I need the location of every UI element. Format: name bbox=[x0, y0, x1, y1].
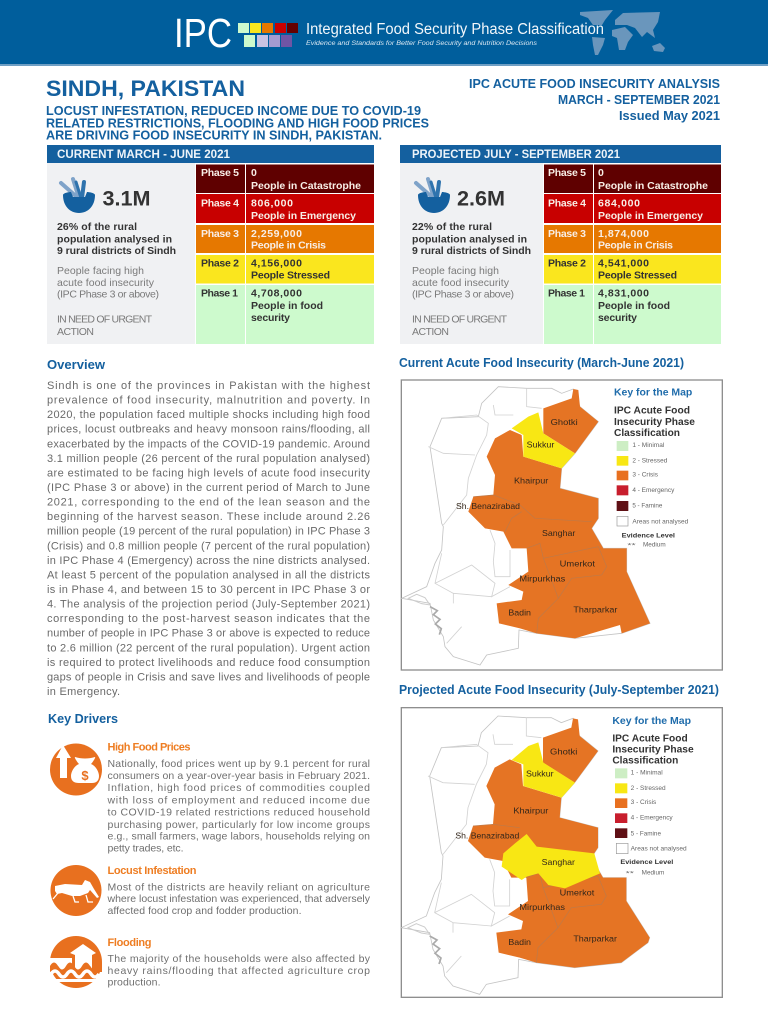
projected phase 2 row bbox=[544, 255, 721, 284]
map key: Medium bbox=[643, 542, 666, 549]
map key: 2 - Stressed bbox=[632, 457, 668, 464]
overview text: exacerbated by the impacts of the COVID-19 pandemic. Around bbox=[47, 438, 370, 450]
current population share: 9 rural districts of Sindh bbox=[57, 245, 176, 257]
panel: current map bbox=[401, 380, 722, 670]
overview text: 2020, the population faced multiple shocks including high food bbox=[47, 409, 370, 421]
projected phase 2 row: Phase 2 bbox=[548, 258, 586, 270]
driver: locust infestation bbox=[50, 865, 371, 917]
subtitle bbox=[46, 103, 429, 142]
map: phase 2 districts Sukkur and Sanghar bbox=[502, 742, 600, 888]
current phase 1 row bbox=[196, 285, 374, 344]
driver: high food prices bbox=[50, 742, 370, 854]
projected phase 1 row: security bbox=[598, 312, 637, 324]
map: district labels: Ghotki bbox=[550, 747, 577, 757]
projected population share: population analysed in bbox=[412, 234, 527, 246]
current population share bbox=[57, 221, 176, 257]
projected phase 1 row: 4,831,000 bbox=[598, 288, 649, 300]
projected phase 4 row: 684,000 bbox=[598, 198, 640, 210]
projected phase 5 row bbox=[544, 164, 721, 193]
overview text bbox=[47, 380, 370, 698]
map key: Insecurity Phase bbox=[614, 417, 696, 428]
overview text: is in Phase 4, and between 15 to 30 percent in IPC Phase 3 or bbox=[47, 584, 370, 596]
map: district labels: Tharparkar bbox=[573, 934, 617, 944]
overview text: number of people in IPC Phase 3 or above is expected to reduce bbox=[47, 628, 370, 640]
high food prices text: Nationally, food prices went up by 9.1 percent for rural bbox=[108, 758, 370, 770]
map: district labels: Mirpurkhas bbox=[519, 574, 565, 584]
current phase 5 row bbox=[196, 164, 374, 193]
current population share: population analysed in bbox=[57, 234, 172, 246]
high food prices text bbox=[106, 758, 370, 854]
map key: IPC Acute Food bbox=[614, 406, 690, 417]
projected need description: IN NEED OF URGENT bbox=[412, 314, 508, 326]
map key: Key for the Map bbox=[612, 716, 691, 727]
map: district labels: Sanghar bbox=[542, 528, 576, 538]
map: district labels: Khairpur bbox=[513, 805, 549, 815]
high food prices text: purchasing power, particularly for low income groups bbox=[108, 819, 370, 831]
panel: projected map bbox=[401, 708, 722, 997]
high food prices text: Inflation, high food prices of commodities coupled bbox=[108, 782, 370, 794]
locust infestation heading: Locust Infestation bbox=[108, 865, 197, 877]
icon: bowl with wheat bbox=[416, 179, 450, 213]
icon: food prices bbox=[50, 744, 102, 796]
overview text: (Crisis) and 0.8 million people (7 percent of the rural population) bbox=[47, 540, 370, 552]
current phase 3 row: Phase 3 bbox=[201, 228, 239, 240]
map key: Medium bbox=[642, 870, 664, 877]
high food prices text: consumers on a year-over-year basis in February 2021. bbox=[108, 770, 370, 782]
overview text: 4. The analysis of the projection period (July-September 2021) bbox=[47, 599, 370, 611]
map: district labels: Khairpur bbox=[514, 475, 549, 485]
projected population share: 9 rural districts of Sindh bbox=[412, 245, 531, 257]
current phase 2 row bbox=[196, 255, 374, 284]
map key: Key for the Map bbox=[614, 388, 692, 399]
high food prices text: e.g., small farmers, wage labors, households relying on bbox=[108, 830, 370, 842]
map key: ** bbox=[626, 870, 635, 877]
locust infestation text: where locust infestation was experienced, that adversely bbox=[106, 893, 371, 905]
map key: 4 - Emergency bbox=[632, 487, 675, 494]
current need description: (IPC Phase 3 or above) bbox=[57, 288, 159, 300]
current phase 1 row: security bbox=[251, 312, 290, 324]
projected phase 5 row: 0 bbox=[598, 167, 604, 179]
overview text: (IPC Phase 3 or above) in the current period of March to June bbox=[47, 482, 370, 494]
current phase 2 row: 4,156,000 bbox=[251, 258, 302, 270]
map: district labels bbox=[455, 747, 617, 947]
current phase 3 row: People in Crisis bbox=[251, 240, 326, 252]
subtitle: LOCUST INFESTATION, REDUCED INCOME DUE TO COVID-19 bbox=[46, 103, 421, 118]
current phase 4 row: 806,000 bbox=[251, 198, 293, 210]
flooding text: The majority of the households were also affected by bbox=[108, 953, 371, 965]
driver: flooding bbox=[50, 936, 371, 988]
current phase 4 row: Phase 4 bbox=[201, 198, 239, 210]
projected need description: ACTION bbox=[412, 326, 449, 338]
projected phase 4 row bbox=[544, 194, 721, 223]
header tagline: Evidence and Standards for Better Food Security and Nutrition Decisions bbox=[306, 40, 538, 47]
icon: food prices: $ bbox=[81, 768, 89, 783]
overview text: At least 5 percent of the population analysed in all the districts bbox=[47, 569, 370, 581]
map: district labels: Sh. Benazirabad bbox=[456, 501, 520, 511]
icon: locust bbox=[50, 865, 102, 916]
map: district labels: Sh. Benazirabad bbox=[455, 830, 520, 840]
overview text: million people (19 percent of the rural population) in IPC Phase 3 bbox=[47, 526, 370, 538]
projected phase 4 row: People in Emergency bbox=[598, 210, 703, 222]
projected need description: (IPC Phase 3 or above) bbox=[412, 288, 514, 300]
high food prices heading: High Food Prices bbox=[108, 742, 190, 754]
map key: 5 - Famine bbox=[632, 503, 663, 510]
overview text: in Emergency. bbox=[47, 686, 120, 698]
key drivers heading: Key Drivers bbox=[48, 711, 118, 726]
projected phase 1 row: People in food bbox=[598, 300, 670, 312]
map: district labels: Sukkur bbox=[526, 769, 554, 779]
panel: current period bbox=[47, 145, 374, 344]
overview text: is required to protect livelihoods and reduce food consumption bbox=[47, 657, 370, 669]
overview heading: Overview bbox=[47, 357, 106, 372]
current map heading: Current Acute Food Insecurity (March-June 2021) bbox=[399, 356, 684, 370]
icon: bowl with wheat bbox=[61, 179, 95, 213]
analysis details: IPC ACUTE FOOD INSECURITY ANALYSIS bbox=[469, 76, 720, 91]
overview text: to 2.6 million (22 percent of the rural population). Urgent action bbox=[47, 642, 370, 654]
panel: projected period bbox=[400, 145, 721, 344]
map: district labels: Sukkur bbox=[527, 439, 555, 449]
high food prices text: with loss of employment and reduced income due bbox=[106, 794, 370, 806]
current phase 1 row: Phase 1 bbox=[201, 288, 238, 300]
projected phase 4 row: Phase 4 bbox=[548, 198, 586, 210]
projected population share bbox=[412, 221, 531, 257]
map key: Insecurity Phase bbox=[612, 745, 694, 756]
analysis details: MARCH - SEPTEMBER 2021 bbox=[558, 92, 720, 107]
current phase 5 row: 0 bbox=[251, 167, 257, 179]
map key: 3 - Crisis bbox=[631, 799, 656, 806]
flooding text: heavy rains/flooding that affected agriculture crop bbox=[108, 965, 370, 977]
current need description: IN NEED OF URGENT bbox=[57, 314, 153, 326]
projected need description bbox=[412, 265, 514, 338]
title: SINDH, PAKISTAN bbox=[46, 76, 245, 101]
subtitle: ARE DRIVING FOOD INSECURITY IN SINDH, PAKISTAN. bbox=[46, 128, 382, 142]
map key: Evidence Level bbox=[622, 532, 675, 539]
map: district base bbox=[402, 387, 650, 665]
map key: 1 - Minimal bbox=[631, 769, 663, 776]
overview text: 2021, corresponding to the end of the lean season and the bbox=[47, 497, 370, 509]
map key bbox=[612, 716, 694, 877]
map: district labels: Tharparkar bbox=[573, 605, 618, 615]
map key: IPC Acute Food bbox=[612, 733, 688, 744]
current need description bbox=[57, 265, 159, 338]
flooding heading: Flooding bbox=[108, 937, 152, 949]
world map graphic bbox=[580, 10, 665, 55]
locust infestation text bbox=[106, 882, 371, 917]
current headline number: 3.1M bbox=[102, 188, 150, 210]
map: district labels: Umerkot bbox=[560, 888, 595, 898]
map key bbox=[614, 388, 696, 549]
projected need description: People facing high bbox=[412, 265, 499, 277]
current need description: People facing high bbox=[57, 265, 144, 277]
projected phase 3 row: People in Crisis bbox=[598, 240, 673, 252]
map key: Classification bbox=[612, 755, 678, 766]
current phase 1 row: People in food bbox=[251, 300, 323, 312]
map key: 2 - Stressed bbox=[631, 785, 666, 792]
current phase 1 row: 4,708,000 bbox=[251, 288, 302, 300]
map: district base bbox=[401, 716, 650, 994]
projected phase 1 row bbox=[544, 285, 721, 344]
projected phase 5 row: People in Catastrophe bbox=[598, 180, 708, 192]
current need description: ACTION bbox=[57, 326, 94, 338]
projected headline number: 2.6M bbox=[457, 188, 505, 210]
locust infestation text: Most of the districts are heavily reliant on agriculture bbox=[108, 882, 370, 894]
map key: 1 - Minimal bbox=[632, 442, 664, 449]
current phase 4 row: People in Emergency bbox=[251, 210, 356, 222]
map: phase 2 district Sukkur bbox=[512, 412, 575, 468]
projected map heading: Projected Acute Food Insecurity (July-September 2021) bbox=[399, 683, 719, 697]
map: phase 3 districts bbox=[468, 389, 650, 638]
map: district labels: Mirpurkhas bbox=[519, 902, 565, 912]
header title: Integrated Food Security Phase Classification bbox=[306, 21, 604, 38]
projected need description: acute food insecurity bbox=[412, 277, 510, 289]
current phase 5 row: Phase 5 bbox=[201, 167, 239, 179]
map key: Evidence Level bbox=[620, 859, 674, 866]
current phase 3 row: 2,259,000 bbox=[251, 228, 302, 240]
projected period heading: PROJECTED JULY - SEPTEMBER 2021 bbox=[412, 147, 620, 161]
high food prices text: to COVID-19 related restrictions reduced household bbox=[108, 806, 370, 818]
projected phase 2 row: 4,541,000 bbox=[598, 258, 649, 270]
map key: ** bbox=[627, 542, 637, 549]
projected phase 2 row: People Stressed bbox=[598, 270, 677, 282]
overview text: beginning of the harvest season. These include around 2.26 bbox=[47, 511, 370, 523]
map key: 4 - Emergency bbox=[631, 814, 674, 821]
icon: flood bbox=[50, 936, 102, 988]
map key: 5 - Famine bbox=[631, 830, 661, 837]
overview text: Sindh is one of the provinces in Pakistan with the highest bbox=[47, 380, 370, 392]
header band bbox=[0, 0, 768, 66]
projected population share: 22% of the rural bbox=[412, 221, 492, 233]
map: district labels: Badin bbox=[508, 608, 531, 618]
projected phase 3 row bbox=[544, 225, 721, 253]
high food prices text: petty trades, etc. bbox=[108, 842, 184, 854]
locust infestation text: affected food crop and fodder production. bbox=[108, 905, 302, 917]
map: district labels: Ghotki bbox=[551, 417, 578, 427]
map key: Areas not analysed bbox=[632, 518, 689, 525]
map: district labels: Sanghar bbox=[542, 857, 575, 867]
map key: 3 - Crisis bbox=[632, 472, 658, 479]
overview text: gaps of people in Crisis and save lives and livelihoods of people bbox=[47, 671, 370, 683]
overview text: prevalence of food insecurity, malnutrition and poverty. In bbox=[47, 395, 370, 407]
current phase 3 row bbox=[196, 225, 374, 253]
map key: Areas not analysed bbox=[631, 846, 687, 853]
subtitle: RELATED RESTRICTIONS, FLOODING AND HIGH FOOD PRICES bbox=[46, 115, 429, 130]
flooding text bbox=[108, 953, 371, 988]
IPC logo bbox=[174, 10, 298, 56]
current need description: acute food insecurity bbox=[57, 277, 155, 289]
analysis details bbox=[469, 76, 720, 123]
overview text: 3.1 million people (26 percent of the rural population analysed) bbox=[47, 453, 370, 465]
map: district labels: Umerkot bbox=[560, 559, 596, 569]
current population share: 26% of the rural bbox=[57, 221, 137, 233]
overview text: corresponding to the post-harvest season indicates that the bbox=[47, 613, 370, 625]
map key: Classification bbox=[614, 428, 680, 439]
map: district labels bbox=[456, 417, 618, 618]
flooding text: production. bbox=[108, 976, 160, 988]
IPC logo: IPC bbox=[174, 10, 232, 56]
current period heading: CURRENT MARCH - JUNE 2021 bbox=[57, 147, 230, 161]
projected phase 3 row: 1,874,000 bbox=[598, 228, 649, 240]
map: phase 3 districts bbox=[468, 718, 650, 968]
projected phase 1 row: Phase 1 bbox=[548, 288, 585, 300]
current phase 2 row: People Stressed bbox=[251, 270, 330, 282]
current phase 5 row: People in Catastrophe bbox=[251, 180, 361, 192]
overview text: are estimated to be facing high levels of acute food insecurity bbox=[47, 467, 370, 479]
analysis details: Issued May 2021 bbox=[619, 108, 720, 123]
overview text: prices, locust outbreaks and heavy monsoon rains/flooding, all bbox=[47, 424, 370, 436]
projected phase 5 row: Phase 5 bbox=[548, 167, 586, 179]
projected phase 3 row: Phase 3 bbox=[548, 228, 586, 240]
map: district labels: Badin bbox=[508, 937, 531, 947]
current phase 4 row bbox=[196, 194, 374, 223]
current phase 2 row: Phase 2 bbox=[201, 258, 239, 270]
overview text: in IPC Phase 4 (Emergency) across the nine districts analysed. bbox=[47, 555, 370, 567]
